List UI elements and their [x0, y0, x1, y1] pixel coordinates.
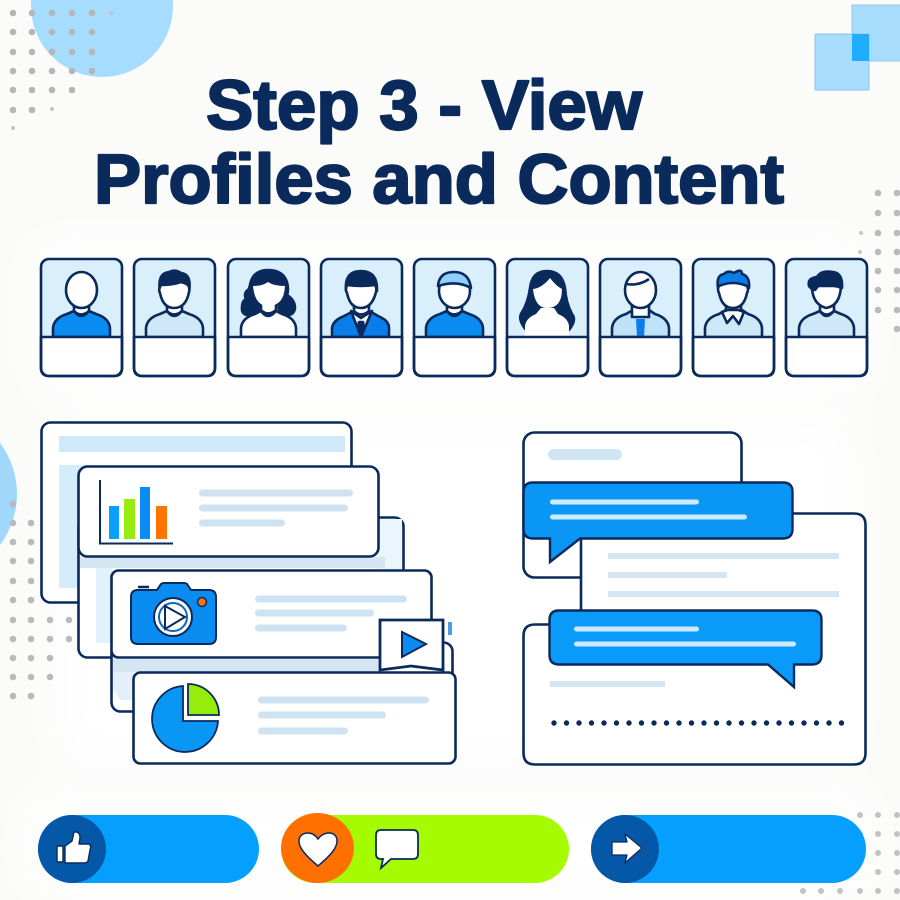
card: pie chart — [134, 672, 456, 764]
top comment card — [524, 432, 742, 578]
icon: video play card — [380, 620, 452, 670]
decoration: left dots — [13, 504, 69, 696]
title line 2: Profiles and Content — [94, 140, 784, 218]
button: next — [591, 815, 866, 883]
pie chart — [152, 684, 219, 752]
icon: chat bubble — [376, 830, 418, 868]
second back panel — [78, 518, 404, 658]
text lines — [258, 696, 429, 734]
decoration: left circle — [0, 409, 17, 579]
icon: camera — [131, 583, 216, 644]
icon: thumbs up — [57, 832, 91, 863]
icon: heart — [299, 833, 337, 866]
icon: arrow — [612, 834, 642, 863]
profile card 3 — [228, 259, 309, 376]
panel: comments — [524, 432, 866, 764]
profile card 1 — [41, 259, 122, 376]
back panel — [42, 422, 352, 602]
profile card 6 — [507, 259, 588, 376]
decoration: top-right squares — [815, 5, 900, 90]
speech bubble 1 — [524, 482, 792, 562]
decoration: right small dots — [860, 233, 861, 252]
decoration: bottom-right dots — [803, 815, 897, 891]
profile cards row — [41, 259, 867, 376]
profile card 7 — [600, 259, 681, 376]
text lines — [550, 553, 839, 687]
decoration: top-left small dots — [13, 13, 111, 128]
profile card 2 — [134, 259, 215, 376]
button: like — [38, 815, 259, 883]
card: bar chart — [78, 466, 378, 556]
profile card 8 — [693, 259, 774, 376]
button: react and comment — [281, 813, 569, 883]
lower back panel — [112, 642, 452, 712]
title line 1: Step 3 - View — [206, 66, 643, 144]
profile card 5 — [414, 259, 495, 376]
decoration: top-left circle — [31, 0, 173, 77]
card: camera — [112, 570, 432, 658]
profile card 4 — [321, 259, 402, 376]
main comment card — [524, 514, 866, 764]
text lines — [255, 596, 407, 632]
profile card 9 — [786, 259, 867, 376]
decoration: right dots — [878, 193, 897, 329]
panel: stacked content cards — [42, 422, 456, 764]
title — [94, 66, 784, 218]
dotted line — [554, 720, 843, 726]
speech bubble 2 — [550, 610, 822, 687]
text lines — [199, 490, 353, 526]
bar chart — [100, 480, 173, 544]
decoration: top-left dots — [13, 13, 92, 110]
